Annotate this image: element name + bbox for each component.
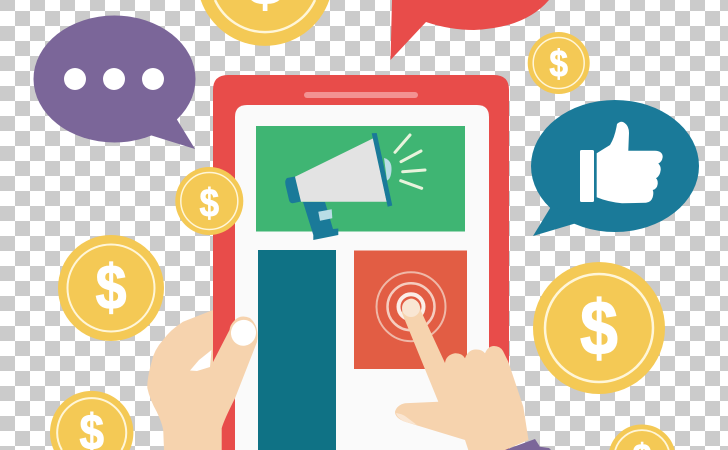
coin: small left overlapping tablet: $ (200, 180, 219, 225)
coin: large right: $ (580, 285, 618, 371)
coin: bottom left (50, 391, 133, 450)
left hand holding tablet (147, 310, 259, 450)
panel: green megaphone banner (256, 126, 465, 240)
tablet (213, 75, 509, 450)
speech bubble: red, top (390, 0, 549, 60)
icon: finger nail (402, 299, 420, 317)
icon: sound rays (395, 135, 425, 188)
coin: small left overlapping tablet (175, 167, 243, 235)
speech bubble: teal with thumbs up (531, 100, 699, 236)
coin: large left: $ (96, 252, 126, 323)
coin: top right small: $ (549, 43, 568, 85)
coin: large left (58, 235, 164, 341)
panel: teal column (258, 250, 336, 450)
speech bubble: purple with dots (34, 16, 196, 149)
coin: top centre (201, 0, 329, 46)
icon: megaphone (285, 133, 392, 240)
coin: bottom right (609, 424, 675, 450)
coin: top right small (528, 32, 590, 94)
right hand pointing (395, 298, 551, 450)
icon: touch rings (376, 272, 446, 341)
coin: large right (533, 262, 665, 394)
panel: orange touch tile (354, 250, 467, 369)
icon: thumbs up (580, 122, 663, 203)
icon: thumb nail (228, 317, 259, 349)
